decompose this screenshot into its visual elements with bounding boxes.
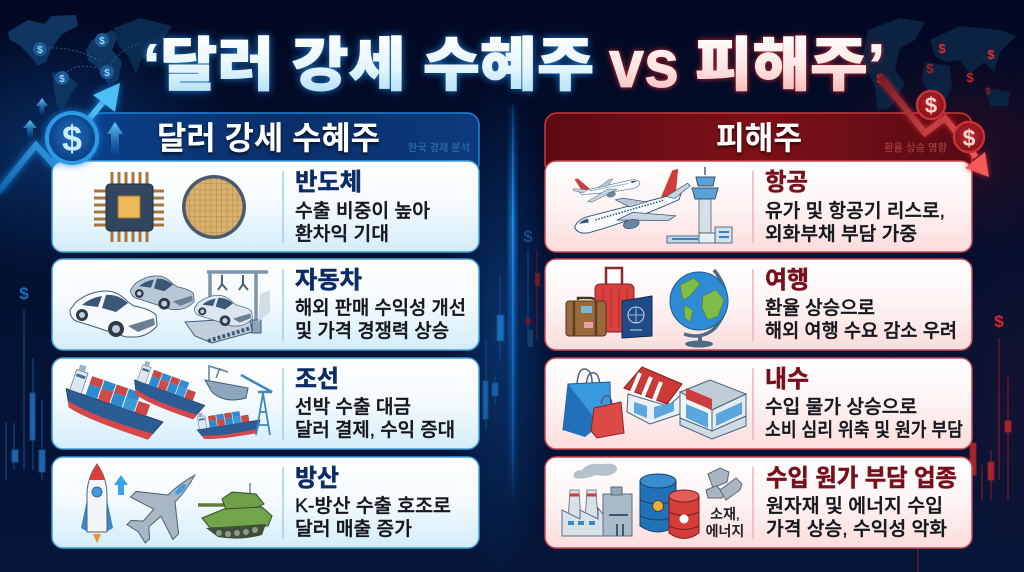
panel: beneficiaries header <box>90 113 479 175</box>
icon: globe <box>670 270 728 348</box>
note: exchange rate impact: 환율 상승 영향 <box>884 141 947 154</box>
icon: luggage and passport <box>566 268 652 338</box>
icon: control tower <box>667 167 732 243</box>
world map: dollar network left: $ <box>104 68 110 79</box>
world map: dollar network left: $ <box>99 36 105 47</box>
arrow: rising dollar <box>0 83 120 192</box>
text: shipbuilding: 달러 결제, 수익 증대 <box>295 419 455 441</box>
panel heading: beneficiaries: 달러 강세 수혜주 <box>157 120 380 156</box>
text: import-cost sectors: 수입 원가 부담 업종 <box>766 465 957 492</box>
title: 피해주’ <box>695 33 885 98</box>
candlesticks right edge <box>918 312 1011 572</box>
candlesticks center <box>483 227 540 430</box>
icon: fighter jet <box>115 454 216 555</box>
card: defense <box>52 454 479 555</box>
candlesticks left edge <box>6 284 45 480</box>
text: domestic demand: 소비 심리 위축 및 원가 부담 <box>765 419 963 441</box>
text: defense: 방산 <box>295 465 339 492</box>
card: import-cost sectors <box>545 457 972 548</box>
icon: dollar coin <box>47 113 97 163</box>
text: aviation: 외화부채 부담 가중 <box>765 223 917 245</box>
text: import-cost sectors: 원자재 및 에너지 수입 <box>766 495 943 517</box>
icon: red dollar coins <box>917 91 984 152</box>
text: defense: 달러 매출 증가 <box>295 518 412 540</box>
text: shipbuilding <box>295 366 455 441</box>
text: automobile <box>295 267 466 342</box>
card: domestic demand <box>545 358 972 449</box>
icon: ships and crane <box>59 359 272 443</box>
label: materials, energy <box>706 506 744 539</box>
text: travel: 여행 <box>765 267 809 294</box>
card: semiconductor <box>52 161 479 252</box>
text: automobile: 및 가격 경쟁력 상승 <box>295 320 449 342</box>
world map: dollar network left: $ <box>37 45 43 56</box>
note: Korean economy analysis: 한국 경제 분석 <box>408 142 470 154</box>
text: travel: 환율 상승으로 <box>765 297 875 319</box>
world map: dollar network right <box>862 18 1016 110</box>
icon: wafer <box>182 175 246 239</box>
icon: cars and assembly line <box>70 272 270 343</box>
text: travel: 해외 여행 수요 감소 우려 <box>765 320 957 342</box>
card: shipbuilding <box>52 358 479 449</box>
world map: dollar network left <box>8 15 172 110</box>
icon: factory <box>562 464 632 536</box>
text: aviation: 유가 및 항공기 리스로, <box>765 200 945 222</box>
text: shipbuilding: 조선 <box>295 366 339 393</box>
text: travel <box>765 267 957 342</box>
text: defense <box>295 465 451 540</box>
panel: victims header <box>545 113 972 175</box>
label: materials, energy: 소재, <box>710 506 740 522</box>
icon: dollar coin: $ <box>62 118 82 159</box>
text: semiconductor: 수출 비중이 높아 <box>295 200 431 222</box>
card: travel <box>545 259 972 350</box>
icon: small up arrows <box>23 98 123 154</box>
title: ‘달러 강세 수혜주 <box>143 33 594 98</box>
candlesticks left edge: $ <box>19 284 29 303</box>
card: automobile <box>52 259 479 350</box>
icon: red dollar coins: $ <box>963 125 976 151</box>
icon: oil barrels <box>640 474 699 538</box>
text: import-cost sectors: 가격 상승, 수익성 악화 <box>766 518 947 540</box>
text: domestic demand: 내수 <box>765 366 809 393</box>
text: aviation: 항공 <box>765 169 808 196</box>
world map: dollar network left: $ <box>59 74 65 85</box>
text: domestic demand: 수입 물가 상승으로 <box>765 396 917 418</box>
text: semiconductor <box>295 169 431 245</box>
icon: up arrow <box>114 475 128 495</box>
text: semiconductor: 환차익 기대 <box>295 223 389 245</box>
icon: rocket <box>81 464 113 543</box>
world map: dollar network right: $ <box>876 71 884 86</box>
title <box>143 26 885 102</box>
panel heading: victims: 피해주 <box>716 120 802 156</box>
world map: dollar network right: $ <box>985 86 991 96</box>
text: aviation <box>765 169 945 245</box>
text: automobile: 자동차 <box>295 267 362 294</box>
text: defense: K-방산 수출 호조로 <box>295 495 451 517</box>
card: aviation <box>545 161 972 252</box>
title: vs <box>609 26 679 102</box>
icon: store <box>624 367 682 424</box>
icon: red dollar coins: $ <box>925 93 937 118</box>
text: import-cost sectors <box>766 465 957 540</box>
icon: shopping bags <box>563 369 624 438</box>
candlesticks right edge: $ <box>994 312 1004 331</box>
text: semiconductor: 반도체 <box>295 169 362 196</box>
icon: metal ingots <box>706 468 742 500</box>
world map: dollar network right: $ <box>926 61 934 76</box>
text: domestic demand <box>765 366 963 441</box>
world map: dollar network right: $ <box>938 41 946 56</box>
icon: chip <box>94 172 164 242</box>
world map: dollar network right: $ <box>966 70 974 85</box>
label: materials, energy: 에너지 <box>706 523 744 539</box>
icon: supermarket <box>680 380 746 439</box>
icon: airplanes <box>567 164 697 241</box>
candlesticks center: $ <box>523 227 533 246</box>
text: shipbuilding: 선박 수출 대금 <box>295 396 411 418</box>
text: automobile: 해외 판매 수익성 개선 <box>295 297 466 319</box>
world map: dollar network right: $ <box>987 47 995 62</box>
arrow: falling won <box>880 77 989 177</box>
icon: tank <box>198 483 272 539</box>
